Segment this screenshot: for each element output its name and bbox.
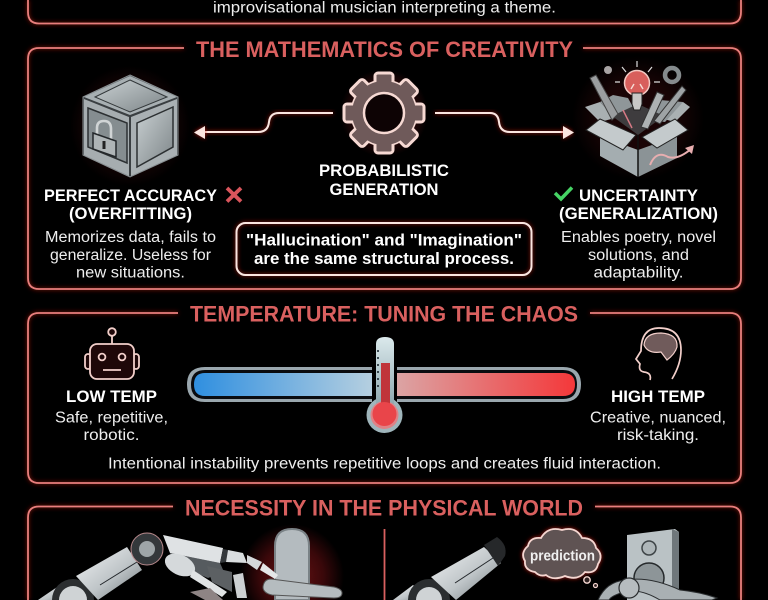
illustration: door plate with handle [598,529,717,600]
callout: hallucination and imagination: are the same structural process. [254,250,514,268]
label: low temp: Safe, repetitive, [55,410,168,426]
label: probabilistic generation [319,162,449,199]
label: uncertainty: UNCERTAINTY [579,187,698,205]
label: perfect accuracy [44,187,217,223]
arrow: gear to perfect accuracy [194,113,333,139]
text: uncertainty description: Enables poetry, novel [561,229,716,246]
icon: green check [555,188,572,199]
label: high temp [590,388,726,444]
text: uncertainty description: solutions, and [588,247,689,264]
text: perfect accuracy description: Memorizes data, fails to [45,229,216,246]
icon: locked metal box [70,66,190,186]
icon: open box with ideas [572,56,704,180]
heading: necessity in the physical world: NECESSITY IN THE PHYSICAL WORLD [185,496,583,520]
label: probabilistic generation: GENERATION [330,181,438,199]
arrow: gear to uncertainty [435,113,574,139]
icon: gear [340,69,428,157]
icon: robot [85,328,139,379]
label: probabilistic generation: PROBABILISTIC [319,162,449,180]
icon: red cross [227,188,241,202]
label: low temp: LOW TEMP [66,388,157,406]
label: perfect accuracy: PERFECT ACCURACY [44,187,217,205]
illustration: robot arm predicting [393,537,506,600]
label: low temp [55,388,168,444]
connector: label to callout [383,204,385,222]
callout: prediction thought cloud: prediction [530,548,595,564]
illustration: robot hand on door handle [38,524,344,600]
panel: necessity in the physical world [28,496,741,600]
text: perfect accuracy description: new situations. [76,264,185,282]
text: uncertainty description [561,229,716,282]
label: uncertainty: (GENERALIZATION) [559,205,718,223]
callout: prediction thought cloud [523,529,601,588]
heading: temperature: TEMPERATURE: TUNING THE CHAOS [190,302,578,326]
icon: head with brain [636,328,681,380]
label: high temp: HIGH TEMP [611,388,705,406]
label: high temp: risk-taking. [617,427,699,444]
text: intentional instability: Intentional instability prevents repetitive loops and creates fluid interaction. [108,456,661,473]
text: perfect accuracy description [45,229,216,282]
label: high temp: Creative, nuanced, [590,410,726,426]
callout: hallucination and imagination [236,223,532,275]
text: improvisational musician: improvisational musician interpreting a theme. [213,0,556,17]
panel: temperature [28,302,741,483]
divider [384,529,386,600]
text: perfect accuracy description: generalize. Useless for [50,247,211,264]
label: perfect accuracy: (OVERFITTING) [69,205,192,223]
callout: hallucination and imagination: "Hallucination" and "Imagination" [246,232,522,250]
label: low temp: robotic. [84,427,140,444]
chart: temperature gradient bar [187,367,581,402]
panel: the mathematics of creativity [28,37,741,289]
label: uncertainty [559,187,718,223]
text: uncertainty description: adaptability. [594,264,684,282]
heading: the mathematics of creativity: THE MATHEMATICS OF CREATIVITY [196,37,573,62]
panel: top section (improvisation) [28,0,741,23]
icon: thermometer [366,337,402,433]
